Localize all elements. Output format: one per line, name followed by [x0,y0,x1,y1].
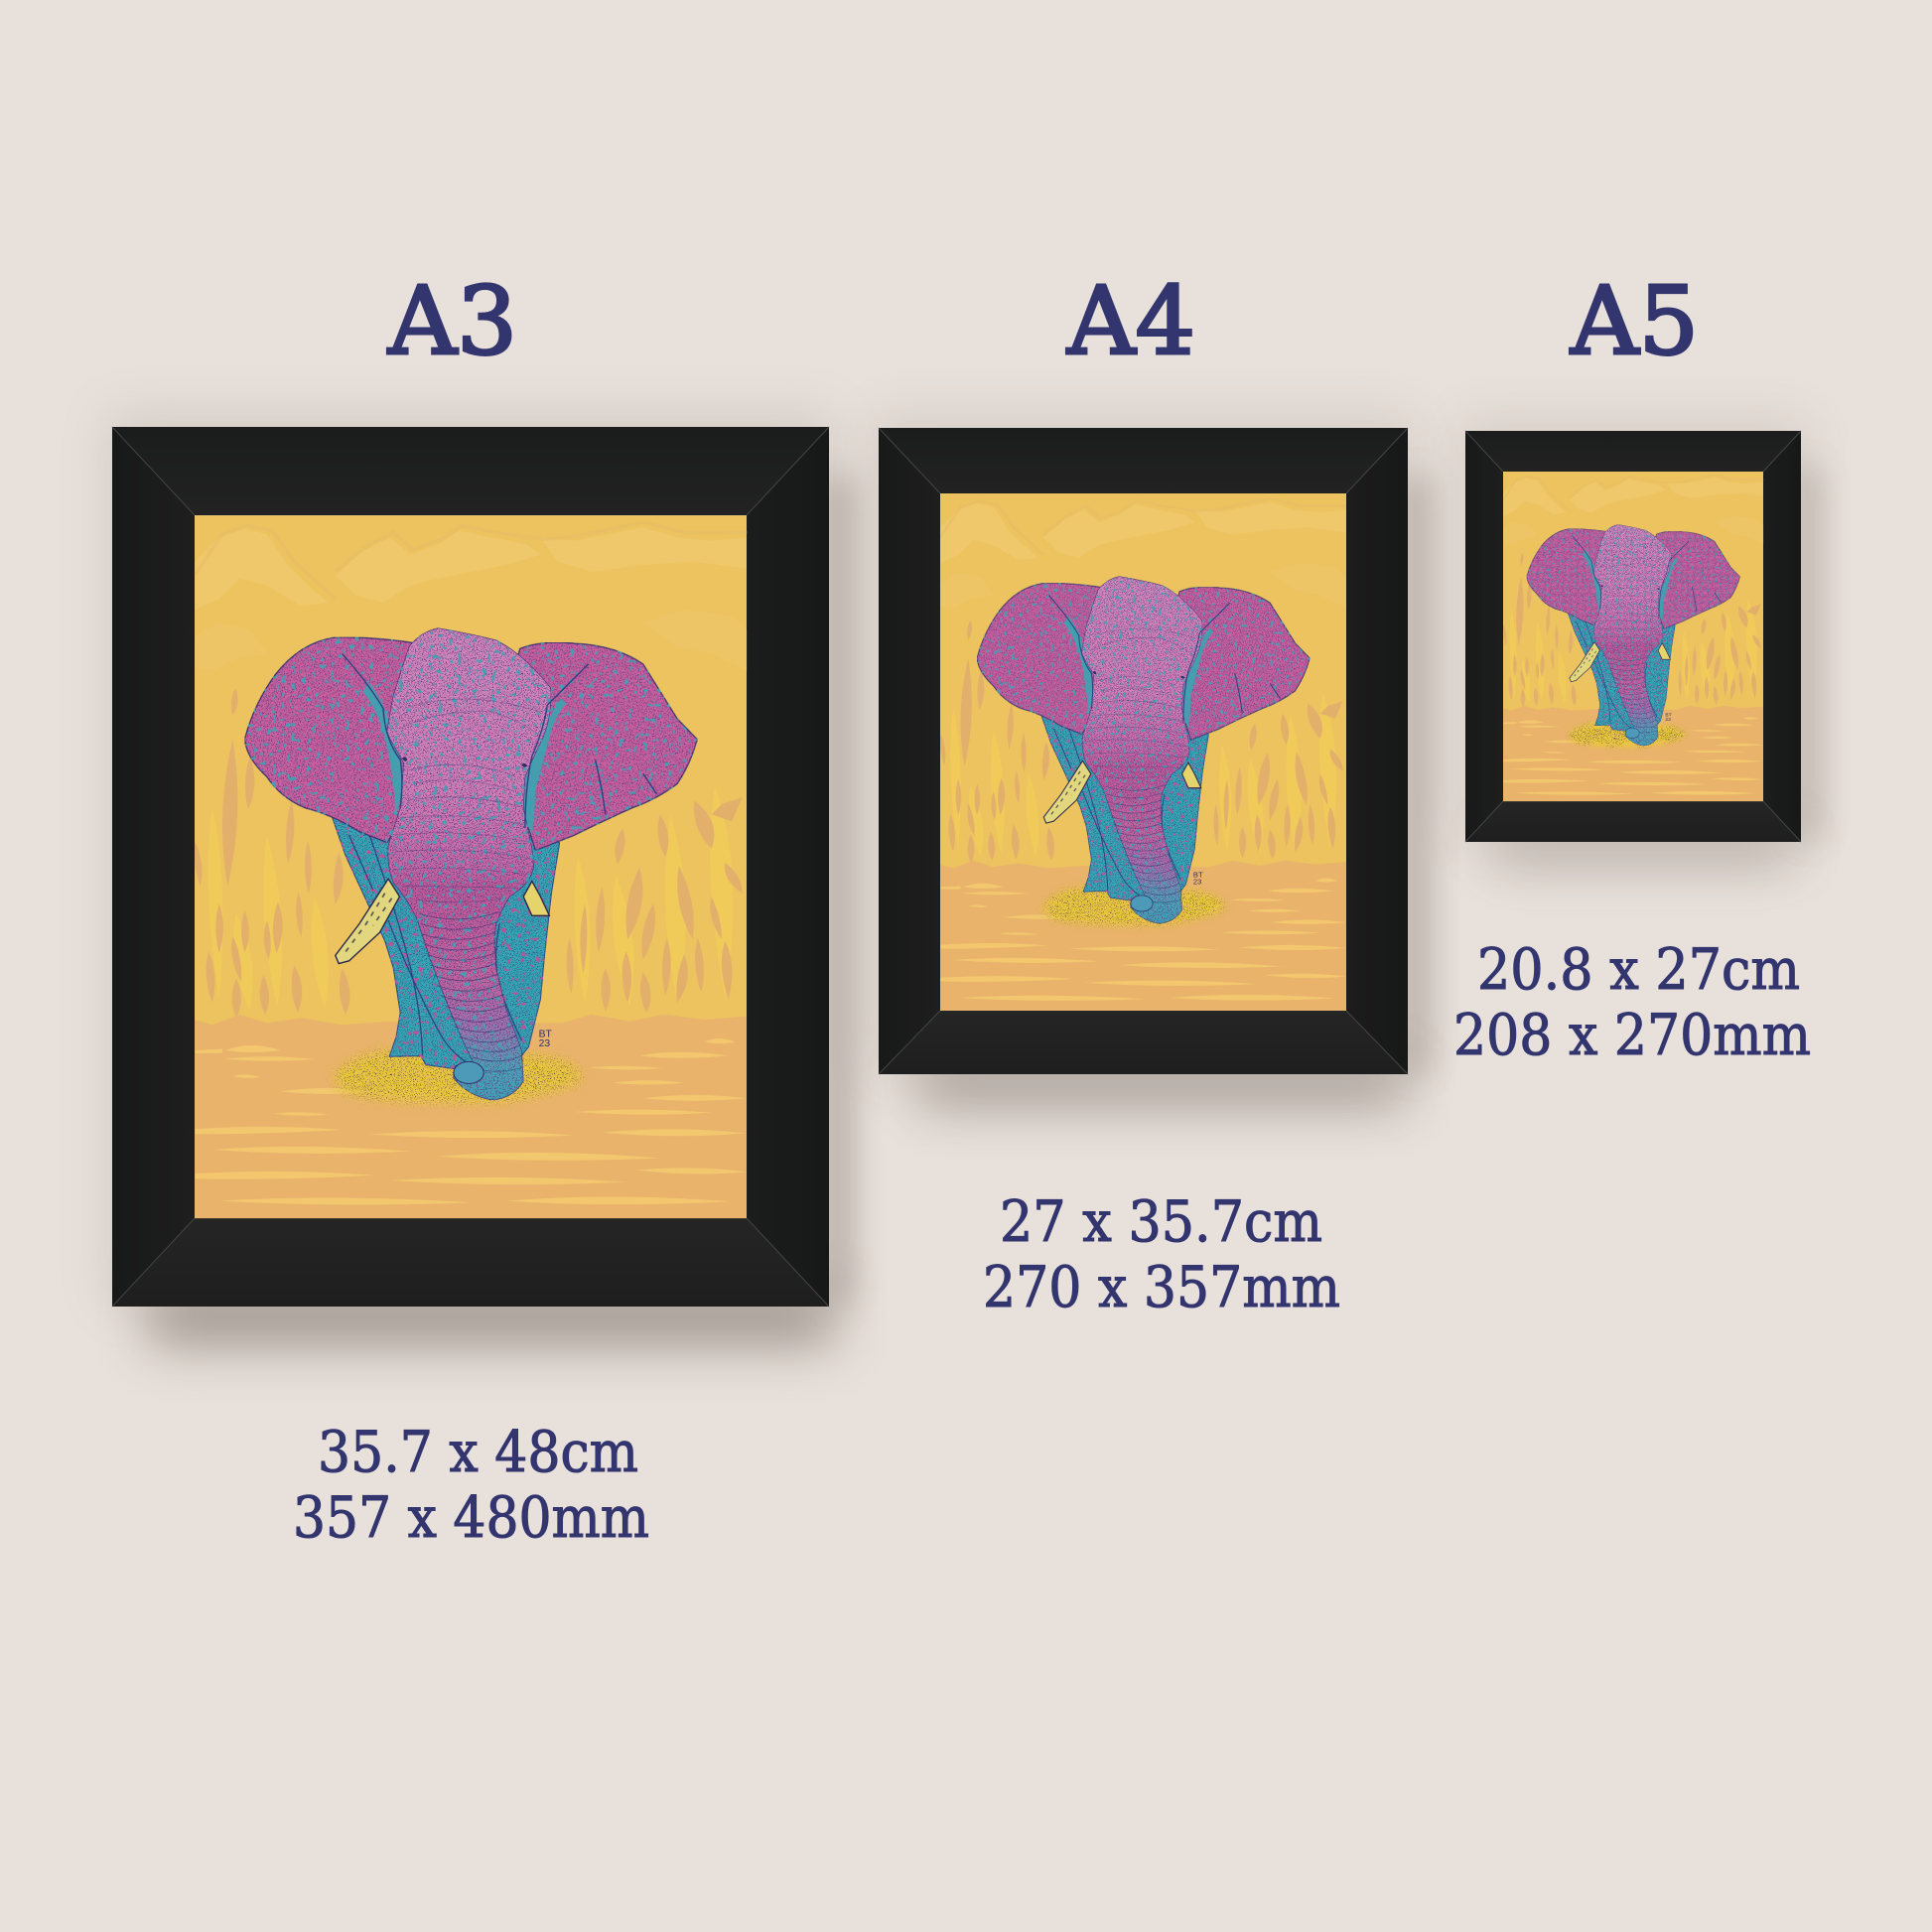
tusk: right [523,882,549,915]
heading: A4: A4 [1066,267,1195,376]
dimensions: A3: 357 x 480mm [293,1485,649,1551]
panel: A3 print [107,267,854,1551]
ear: right [506,642,697,851]
straw patch under the trunk [335,1050,582,1103]
top hills: ridge strokes [195,522,747,599]
signature [539,1029,553,1049]
dimensions: A5: 20.8 x 27cm [1477,937,1800,1003]
signature: 23 [539,1038,550,1049]
dimensions: A3 [293,1420,649,1551]
panel: A4 print [874,267,1430,1320]
frame: A5 black wood frame [1465,431,1801,842]
dimensions: A4: 270 x 357mm [983,1255,1340,1320]
eyes [402,758,527,767]
shadow: A3 frame [107,412,854,1345]
artwork: pink elephant print A5 [1503,472,1763,802]
background: yellow field [195,515,747,1218]
grass: tan brush strokes [195,688,743,1018]
ear: left [244,637,417,843]
trunk wrinkles [419,912,522,1071]
artwork: pink elephant print A4 [940,493,1346,1012]
grass: bright yellow strokes [208,787,734,1010]
leg creases [349,835,521,1064]
ear veins [343,654,656,828]
signature: BT [539,1029,553,1039]
heading: A5: A5 [1570,267,1699,376]
shadow: A5 frame [1461,422,1819,862]
head wrinkles [392,699,540,902]
panel: A5 print [1453,267,1819,1068]
frame: A4 black wood frame [879,428,1408,1074]
dimensions: A4: 27 x 35.7cm [1000,1189,1322,1255]
dimensions: A4 [983,1189,1340,1320]
elephant head and trunk [386,628,551,1100]
ground: light streaks [196,1038,747,1205]
top hills: pale brush patches [195,527,747,671]
elephant body: teal legs [332,814,560,1071]
dimensions: A3: 35.7 x 48cm [318,1420,638,1485]
frame: A3 black wood frame [112,427,829,1307]
ground: orange earth [195,1015,747,1220]
dimensions: A5: 208 x 270mm [1453,1003,1811,1068]
heading: A3: A3 [387,267,517,376]
trunk tip [454,1061,483,1083]
dimensions: A5 [1453,937,1811,1068]
artwork: pink elephant print A3 [195,515,747,1220]
tusk: left [336,879,400,964]
shadow: A4 frame [874,417,1430,1106]
ear root teal shading [362,683,566,835]
